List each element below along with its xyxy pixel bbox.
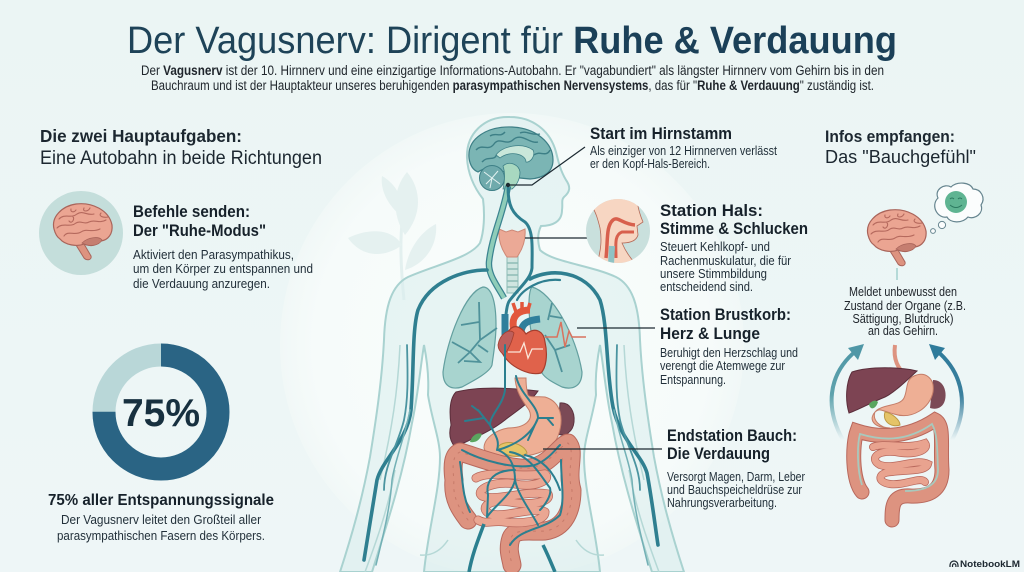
arrow: right upward [929,344,962,440]
lower nerves into legs [469,524,555,572]
stat text: 75% aller Entspannungssignale [48,492,274,509]
callout: Endstation Bauch: Nahrungsverarbeitung. [667,495,777,510]
icon: brain in circle [39,191,123,275]
callout: start im Hirnstamm: Als einziger von 12 Hirnnerven verlässt [590,143,777,158]
left heading [40,126,322,169]
right description text: Meldet unbewusst den [849,284,957,299]
right description text: Sättigung, Blutdruck) [852,311,954,326]
Befehle heading: Der "Ruhe-Modus" [133,222,266,240]
callout: chest line [577,327,655,329]
callout: Endstation Bauch [667,427,806,510]
small intestine [476,474,548,523]
NotebookLM watermark: NotebookLM [960,559,1020,570]
callout: Station Hals: Stimme & Schlucken [660,220,808,238]
callout: Station Hals: entscheidend sind. [660,279,753,294]
arrow: left upward [832,344,864,440]
callout: neck line [525,237,587,239]
right heading [825,127,976,167]
left heading: Eine Autobahn in beide Richtungen [40,148,322,169]
Befehle heading: Befehle senden: [133,203,250,221]
callout: Endstation Bauch: Endstation Bauch: [667,427,797,445]
left heading: Die zwei Hauptaufgaben: [40,126,242,146]
callout: Station Hals [660,202,808,294]
callout: Station Brustkorb [660,306,798,387]
larynx and trachea [499,229,525,293]
heart [498,302,546,374]
right heading: Das "Bauchgefühl" [825,147,976,167]
callout: Station Hals: Station Hals: [660,202,763,220]
intro text: Bauchraum und ist der Hauptakteur unseres beruhigenden parasympathischen Nervensystems, das für "Ruhe & Verdauung" zuständig ist. [151,78,874,93]
ECG line [545,322,586,347]
vagus nerve trunk [489,186,508,298]
stat text: Der Vagusnerv leitet den Großteil aller [61,512,262,527]
callout: Station Brustkorb: Station Brustkorb: [660,306,791,324]
callout: start line [506,147,585,187]
intro text: Der Vagusnerv ist der 10. Hirnnerv und eine einzigartige Informations-Autobahn. Er "vagabundiert" als längster Hirnnerv vom Gehirn bis in den [141,63,884,78]
lungs [443,287,582,388]
callout: Station Brustkorb: Herz & Lunge [660,325,760,343]
abdominal nerve branches [460,345,563,545]
right description text [844,284,966,338]
stat text: parasympathischen Fasern des Körpers. [57,528,265,543]
icon: digestive organs [847,345,946,520]
panel: Befehle senden [39,191,313,291]
large intestine [453,443,572,565]
callout: Station Hals: unsere Stimmbildung [660,266,767,281]
liver, spleen, stomach [450,378,574,457]
background circle [280,113,744,572]
right heading: Infos empfangen: [825,127,955,146]
brain [469,127,553,190]
callout: Endstation Bauch: Versorgt Magen, Darm, Leber [667,469,806,484]
central body figure [340,117,684,572]
Befehle text: um den Körper zu entspannen und [133,261,313,276]
arm muscle contours [365,345,659,572]
small up arrow [896,268,898,280]
Befehle text [133,247,313,291]
callout: start im Hirnstamm [590,125,777,171]
callout: Endstation Bauch: Die Verdauung [667,445,770,463]
Befehle heading [133,203,266,240]
callout: start im Hirnstamm: er den Kopf-Hals-Bereich. [590,156,710,171]
right description text: Zustand der Organe (z.B. [844,298,966,313]
icon: throat cross-section [586,196,650,264]
icon: brain with thought bubble [868,183,983,266]
callout: belly line [543,448,662,450]
body silhouette [340,117,684,572]
callout: Station Brustkorb: Entspannung. [660,372,726,387]
Befehle text: Aktiviert den Parasympathikus, [133,247,294,262]
callout: Station Brustkorb: Beruhigt den Herzschlag und [660,345,798,360]
callout: Station Hals: Rachenmuskulatur, die für [660,253,792,268]
donut chart 75%: 75% [122,392,200,435]
donut chart 75% [104,355,218,469]
stat text [48,492,274,543]
decorative leaves [348,172,436,300]
intro text [141,63,884,93]
callout: Station Brustkorb: verengt die Atemwege zur [660,358,786,373]
Befehle text: die Verdauung anzuregen. [133,276,270,291]
icon: thought cloud [931,183,983,233]
nerves [364,187,658,565]
callout: Endstation Bauch: und Bauchspeicheldrüse zur [667,482,803,497]
title: Der Vagusnerv: Dirigent für Ruhe & Verdauung [127,20,897,62]
right description text: an das Gehirn. [868,323,938,338]
callout: start im Hirnstamm: Start im Hirnstamm [590,125,732,143]
callout: Station Hals: Steuert Kehlkopf- und [660,239,770,254]
